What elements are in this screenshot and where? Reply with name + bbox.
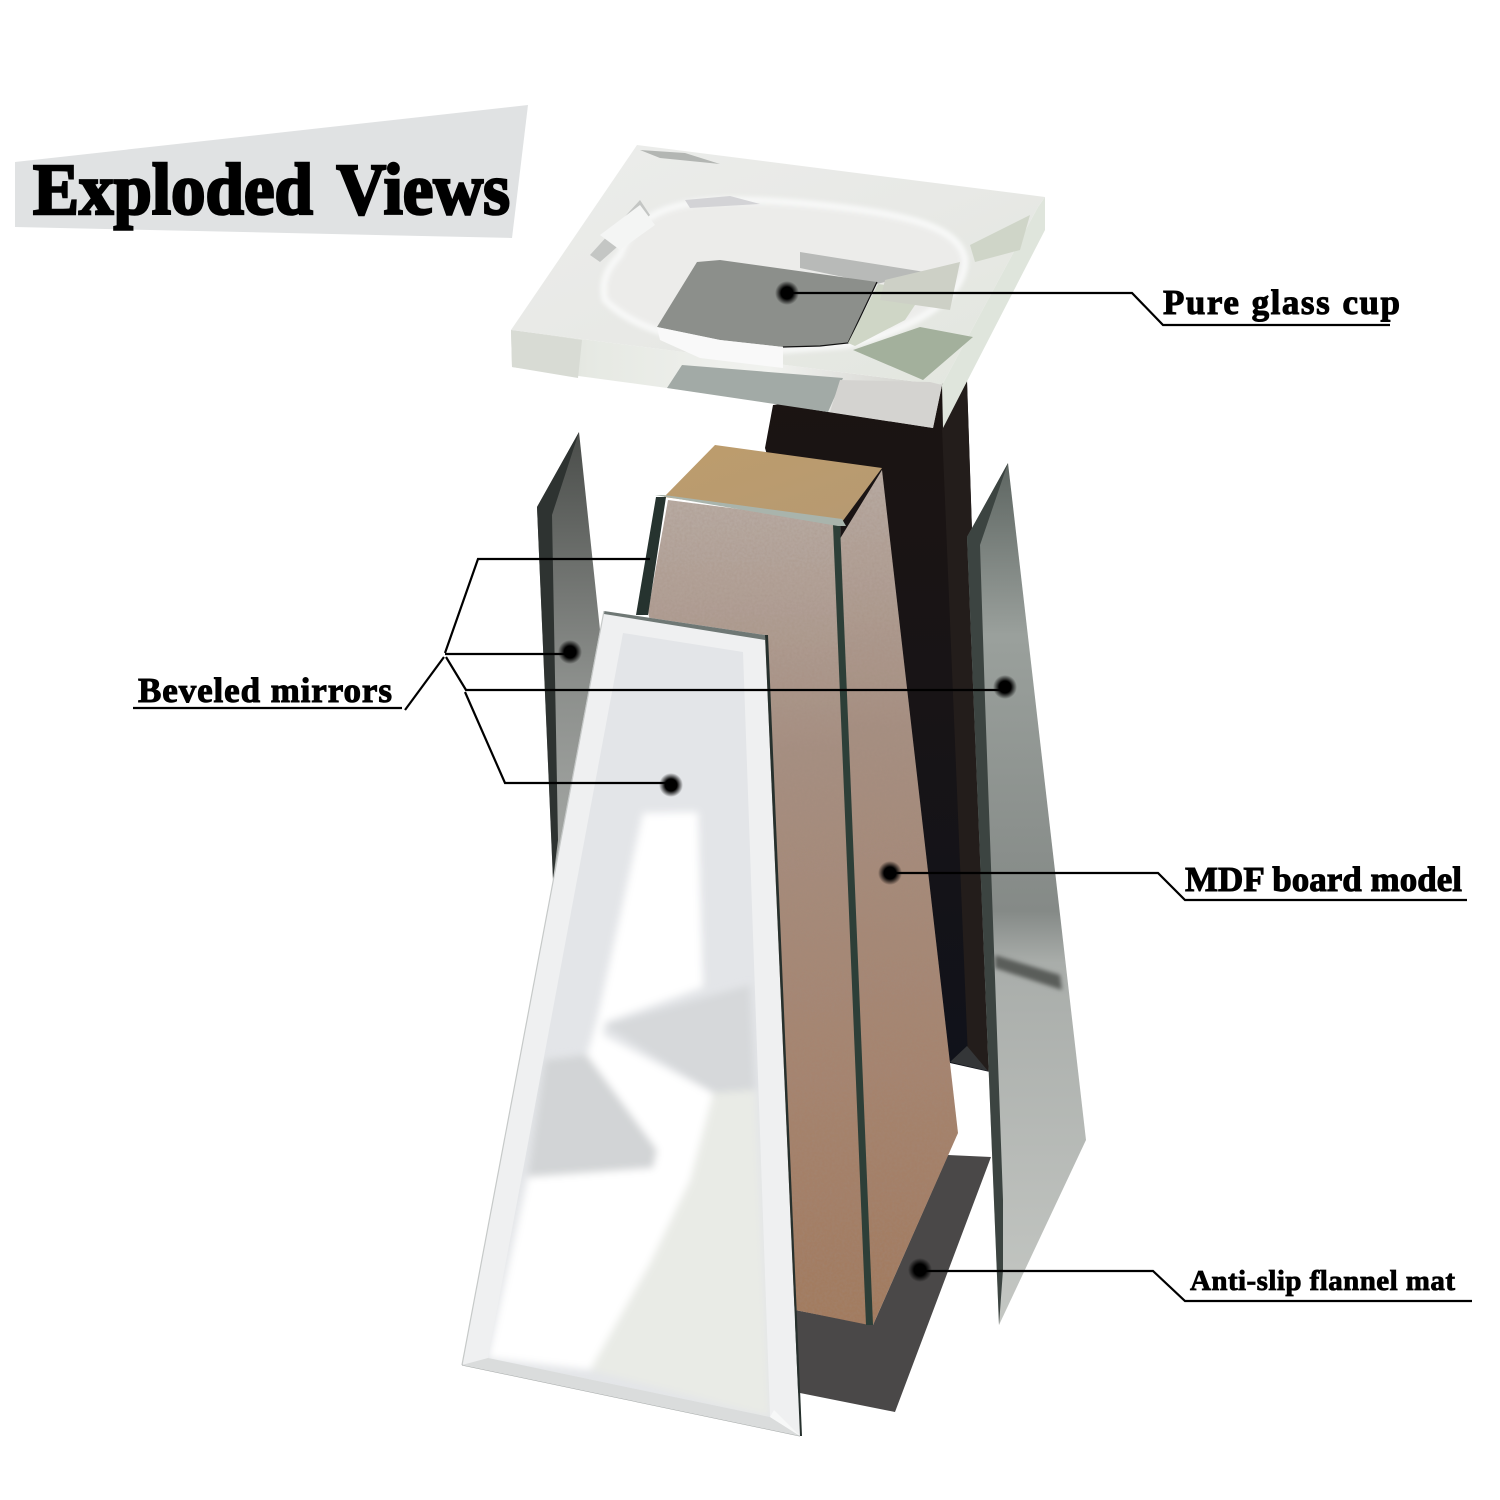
shards right xyxy=(880,262,960,310)
mirror inner body xyxy=(488,633,770,1417)
MDF right face xyxy=(838,470,958,1325)
cup recess xyxy=(604,200,965,350)
label: Beveled mirrors xyxy=(138,671,392,710)
cup lower patch xyxy=(667,365,843,412)
MDF board model xyxy=(636,445,958,1325)
cup inner square edge xyxy=(783,282,877,347)
right mirror xyxy=(967,463,1086,1325)
shards left xyxy=(590,200,650,262)
pure glass cup xyxy=(511,145,1045,428)
title banner xyxy=(15,105,528,238)
anti-slip flannel mat xyxy=(795,1155,991,1412)
mirror edge left xyxy=(636,497,666,615)
callout: anti-slip flannel mat xyxy=(908,1258,1472,1301)
cup right face xyxy=(942,197,1045,428)
shards top xyxy=(640,150,720,164)
cup left speckled end xyxy=(511,330,582,378)
silver front right xyxy=(830,380,942,428)
back panel: black mirror column xyxy=(765,380,990,1072)
MDF left face xyxy=(648,500,869,1325)
cup front face xyxy=(511,330,942,428)
reflection patch xyxy=(848,284,925,346)
mirror reflections xyxy=(488,810,754,1372)
cup rear square xyxy=(800,252,925,284)
white curved lip xyxy=(657,327,783,368)
title: Exploded Views xyxy=(33,149,510,230)
label: Pure glass cup xyxy=(1163,283,1400,322)
left back mirror xyxy=(537,432,600,880)
label: Anti-slip flannel mat xyxy=(1190,1265,1455,1297)
callout: MDF board model xyxy=(878,860,1467,900)
front bevelled white mirror xyxy=(462,611,802,1436)
mirror edge centre xyxy=(833,525,873,1325)
label: MDF board model xyxy=(1185,860,1462,899)
cup inner square xyxy=(657,260,877,347)
mirror edge top xyxy=(655,495,846,526)
cup top surface xyxy=(511,145,1045,385)
callout: bevelled mirrors xyxy=(133,559,1017,797)
green patch xyxy=(853,327,973,380)
callout: pure glass cup xyxy=(775,281,1400,325)
MDF top face xyxy=(664,445,882,522)
